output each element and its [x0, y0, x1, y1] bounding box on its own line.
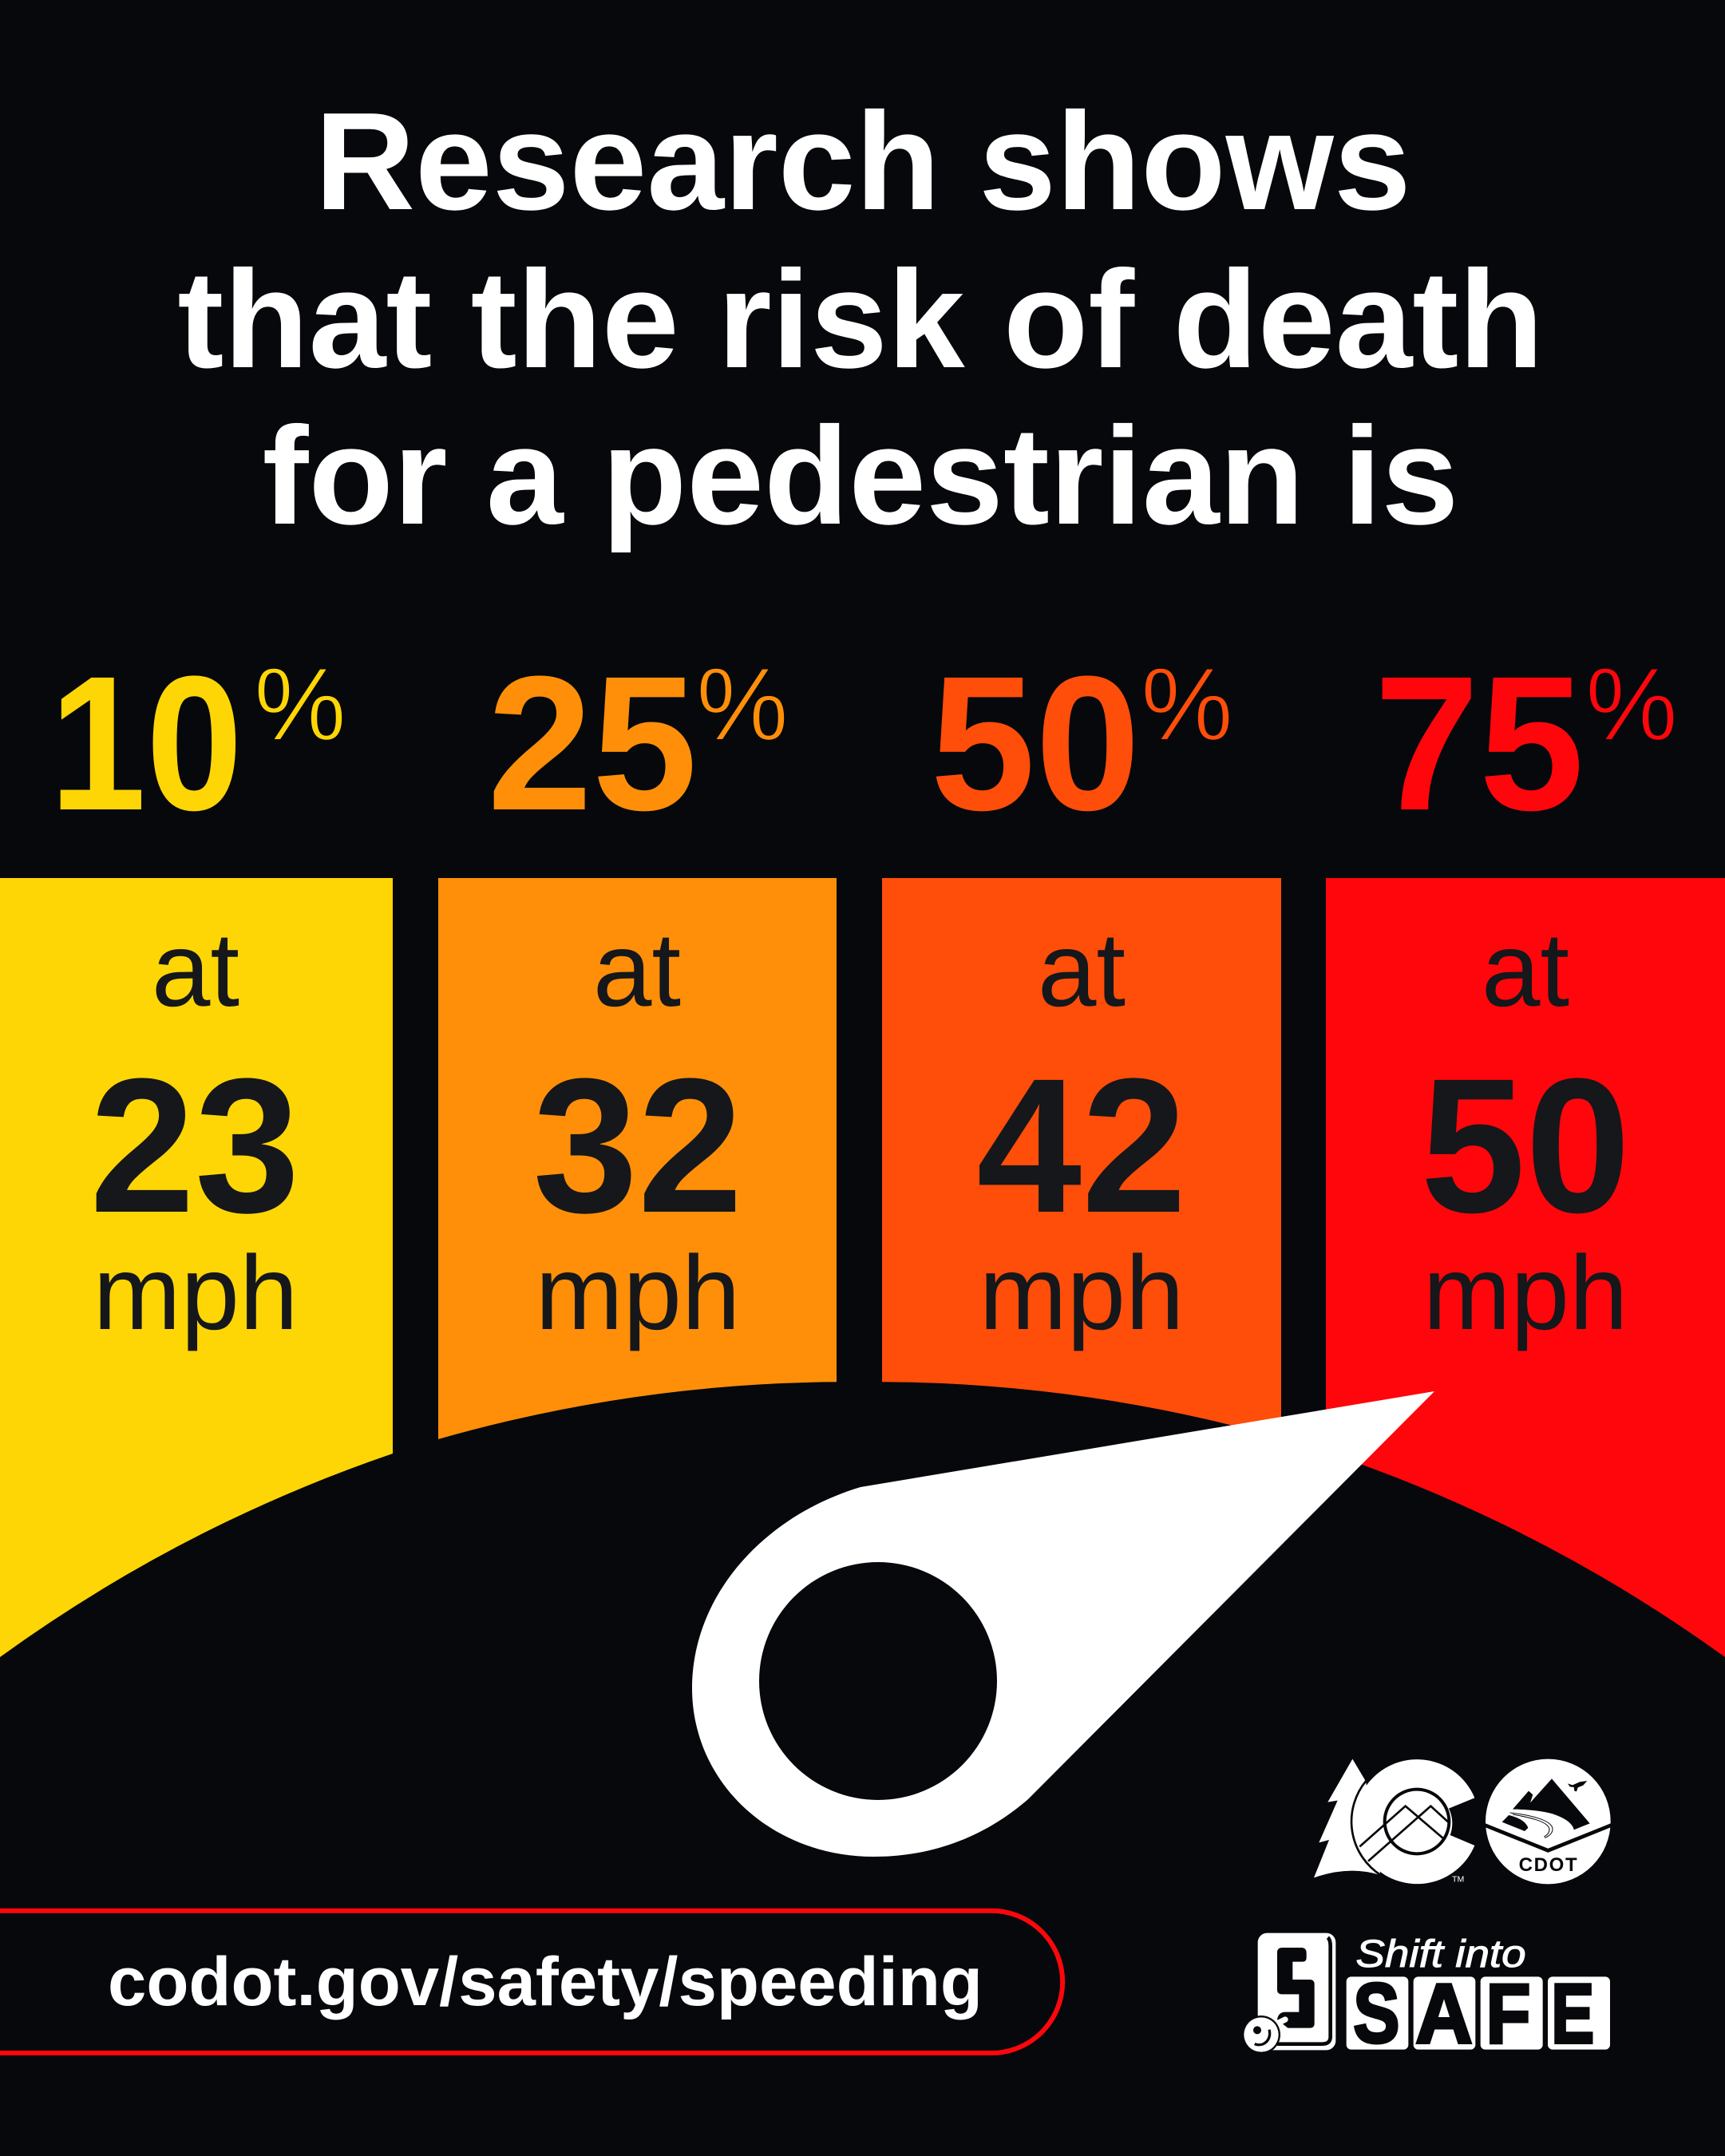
- statistic: 10%: 10: [49, 636, 243, 850]
- statistic: 50%: 50: [931, 636, 1140, 850]
- statistic: 25%: %: [696, 646, 789, 762]
- panel: 42 mph: 42: [977, 1038, 1186, 1252]
- logo: Shift into SAFE wordmark: E: [1551, 1966, 1594, 2061]
- logo: Shift into SAFE wordmark: S: [1353, 1965, 1399, 2061]
- logo: Shift into SAFE wordmark: F: [1486, 1967, 1530, 2061]
- panel: 42 mph: at: [1038, 911, 1126, 1028]
- website link pill: [0, 1911, 1062, 2053]
- logo: Shift into SAFE wordmark: A: [1415, 1966, 1473, 2061]
- title: [177, 83, 1544, 553]
- logo: CDOT: CDOT: [1519, 1854, 1577, 1876]
- statistic: 75%: 75: [1375, 636, 1584, 850]
- website link pill: codot.gov/safety/speeding: [108, 1944, 983, 2020]
- panel: 32 mph: mph: [536, 1234, 740, 1351]
- panel: 32 mph: 32: [533, 1038, 742, 1252]
- statistic: 50%: %: [1141, 646, 1233, 762]
- panel: 23 mph: 23: [89, 1038, 300, 1252]
- statistic: 75%: %: [1585, 646, 1678, 762]
- panel: 50 mph: [1326, 878, 1725, 1657]
- panel: 32 mph: [438, 878, 837, 1439]
- logo: Colorado C with tree: [1314, 1759, 1474, 1885]
- panel: 23 mph: at: [152, 911, 239, 1028]
- panel: 42 mph: mph: [979, 1234, 1184, 1351]
- logo: Shift into SAFE wordmark: [1347, 1932, 1610, 2061]
- logo: Shift into SAFE gear shift icon: [1242, 1933, 1335, 2054]
- panel: 42 mph: [882, 878, 1281, 1438]
- title: Research shows: [315, 83, 1411, 239]
- logo: CDOT: [1485, 1759, 1612, 1884]
- statistic: 25%: 25: [487, 636, 698, 850]
- statistic: 10%: %: [254, 646, 346, 762]
- panel: 23 mph: [0, 878, 393, 1657]
- speedometer needle: [692, 1391, 1434, 1857]
- logo: Colorado C with tree: TM: [1452, 1876, 1464, 1885]
- panel: 50 mph: at: [1482, 911, 1569, 1028]
- panel: 23 mph: mph: [93, 1234, 298, 1351]
- panel: 50 mph: 50: [1421, 1038, 1630, 1252]
- panel: 50 mph: mph: [1423, 1234, 1628, 1351]
- title: for a pedestrian is: [263, 398, 1458, 553]
- panel: 32 mph: at: [593, 911, 681, 1028]
- logo: Shift into SAFE wordmark: Shift into: [1355, 1932, 1526, 1976]
- title: that the risk of death: [177, 241, 1544, 397]
